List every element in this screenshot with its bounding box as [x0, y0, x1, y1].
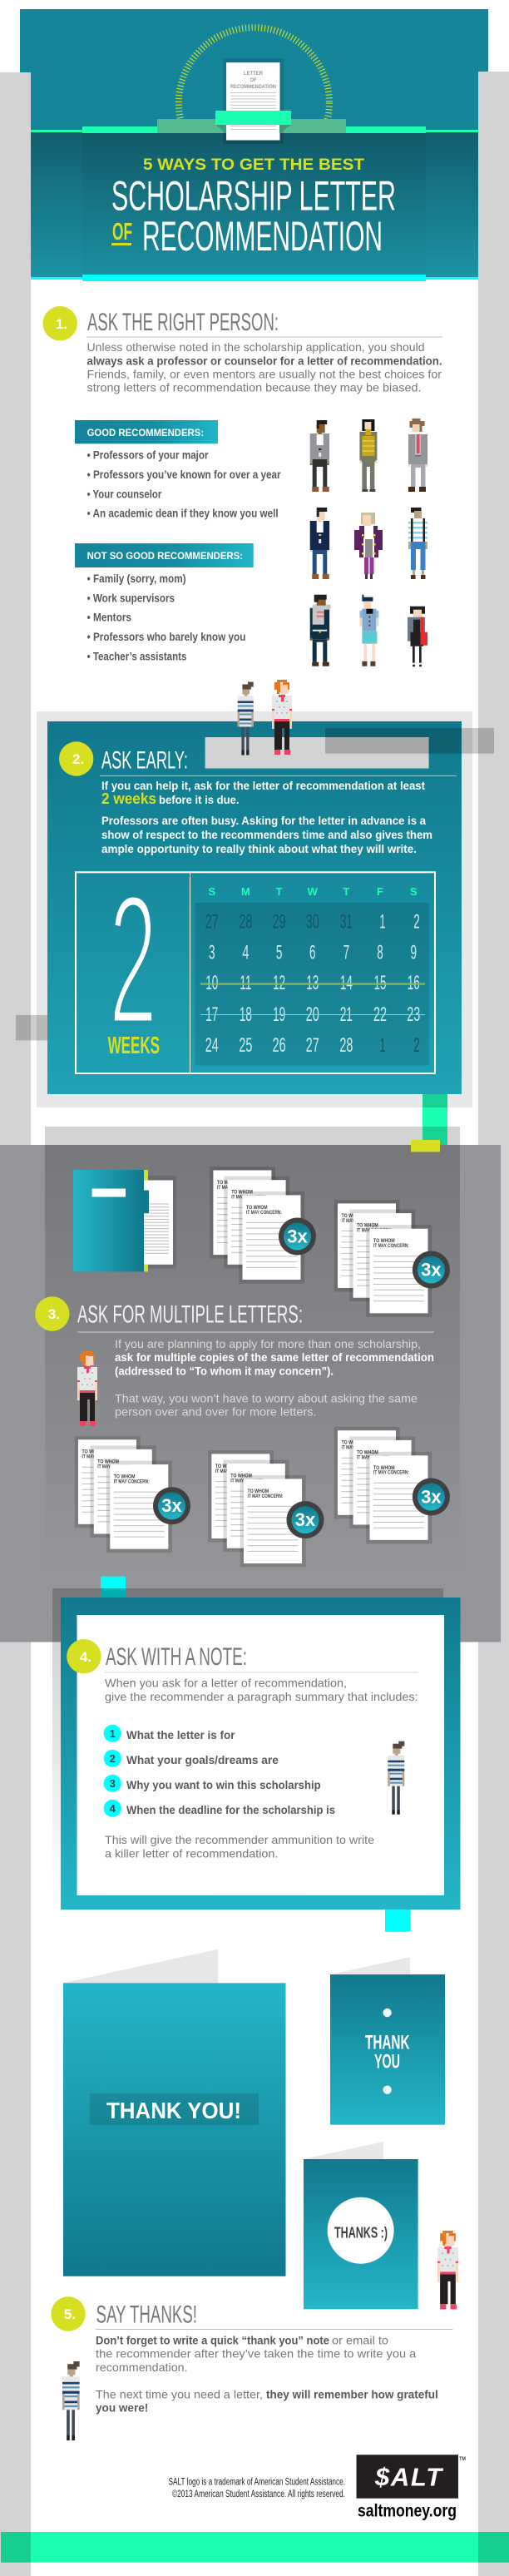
letter stack E: TO WHOM: [357, 1449, 378, 1455]
icon: assistant with red bag: [408, 607, 427, 666]
good recommenders label: [75, 420, 218, 443]
paragraph: thank you note: the recommender after they’ve taken the time to write you a: [96, 2347, 417, 2361]
date grid: 5: [276, 941, 282, 964]
badge 3x: 3x: [161, 1495, 182, 1516]
closing paragraph: This will give the recommender ammunition to write: [105, 1833, 374, 1846]
letter stack A: TO WHOM: [231, 1190, 253, 1196]
title: [111, 156, 396, 260]
paragraph: multiple copies: That way, you won’t have to worry about asking the same: [115, 1391, 418, 1404]
icon: letter of recommendation: [223, 58, 284, 144]
connector: green block: [423, 1094, 447, 1127]
date grid: 31: [340, 910, 353, 933]
step 5: thank you cards: [51, 1949, 458, 2440]
not so good recommenders label: NOT SO GOOD RECOMMENDERS:: [87, 550, 243, 562]
date grid: 2: [413, 910, 420, 933]
number badge 1: 1.: [56, 316, 67, 332]
good recommenders list: • Your counselor: [87, 488, 162, 500]
letter stack D: IT MAY CONCERN:: [215, 1469, 251, 1474]
intro paragraph: Unless otherwise noted in the scholarship application, you should: [86, 340, 424, 354]
card: thanks smiley: [304, 2142, 418, 2309]
weekday headings: T: [343, 885, 349, 898]
letter stack D: [208, 1450, 324, 1568]
not so good recommenders list: • Mentors: [87, 612, 131, 624]
letter stack D: IT MAY CONCERN:: [248, 1494, 283, 1499]
legal text: SALT logo is a trademark of American Student Assistance.: [168, 2478, 345, 2488]
numbered list: What the letter is for: [126, 1729, 235, 1741]
badge 3x: 3x: [421, 1486, 442, 1508]
badge 3x: [153, 1487, 190, 1524]
icon: woman purple coat: [354, 513, 383, 579]
letter stack B: [334, 1200, 450, 1317]
paragraph: multiple copies: ask for multiple copies of the same letter of recommendation: [115, 1350, 434, 1364]
step 3: ask for multiple letters: [0, 1127, 501, 1642]
letter stack C: [75, 1436, 190, 1553]
weekday headings: [208, 885, 418, 898]
letter stack E: [334, 1427, 450, 1543]
icon: letter of recommendation: OF: [250, 77, 257, 83]
numbered list: When the deadline for the scholarship is: [126, 1804, 335, 1816]
letter stack D: TO WHOM: [248, 1489, 269, 1494]
icon: radiating arc: [179, 27, 329, 178]
not so good recommenders list: • Work supervisors: [87, 592, 175, 604]
badge 3x: 3x: [421, 1260, 442, 1280]
date grid: 9: [410, 941, 417, 964]
letter stack A: TO WHOM: [246, 1205, 268, 1211]
paragraph: thank you note: Don’t forget to write a quick “thank you” note: [96, 2333, 329, 2346]
title: 5 WAYS TO GET THE BEST: [143, 156, 364, 174]
header banner: [0, 9, 509, 281]
number badge 3: 3.: [48, 1306, 60, 1322]
letter stack C: IT MAY CONCERN:: [114, 1479, 150, 1484]
date grid: 10: [205, 972, 218, 994]
date grid: 11: [240, 972, 251, 994]
heading 2: ASK EARLY:: [101, 746, 188, 774]
letter stack A: IT MAY CONCERN:: [217, 1185, 253, 1191]
date grid: 24: [205, 1034, 219, 1057]
icon: letter of recommendation: LETTER: [244, 71, 263, 77]
number badge 2: 2.: [72, 751, 84, 767]
paragraph: two weeks: before it is due.: [159, 793, 240, 806]
letter stack E: IT MAY CONCERN:: [341, 1445, 378, 1451]
letter stack B: IT MAY CONCERN:: [373, 1243, 409, 1249]
numbered list: 2: [110, 1752, 116, 1765]
weekday headings: S: [410, 885, 418, 898]
letter stack B: TO WHOM: [373, 1238, 395, 1244]
letter stack C: IT MAY CONCERN:: [82, 1454, 118, 1460]
badge 3x: 3x: [287, 1226, 308, 1246]
paragraph: thank you note: The next time you need a letter,: [96, 2387, 263, 2400]
numbered list: [104, 1725, 335, 1817]
date grid: 21: [340, 1003, 353, 1026]
paragraph: thank you note: or email to: [332, 2333, 388, 2346]
heading 5: SAY THANKS!: [96, 2301, 197, 2329]
number badge 3: [35, 1296, 70, 1331]
weeks label: WEEKS: [108, 1033, 160, 1059]
date grid: 7: [343, 941, 349, 964]
paragraph: two weeks: Professors are often busy. Asking for the letter in advance is a: [101, 814, 426, 827]
good recommenders list: • Professors of your major: [87, 449, 209, 462]
paragraph: two weeks: ample opportunity to really think about what they will write.: [101, 842, 417, 855]
badge 3x: [279, 1218, 316, 1255]
card: thanks smiley: THANKS :): [334, 2223, 388, 2241]
intro paragraph: When you ask for a letter of recommendation,: [105, 1677, 347, 1690]
legal text: [168, 2478, 345, 2499]
date grid: [205, 910, 420, 1057]
icon: teacher navy with scarf: [310, 595, 331, 666]
date grid: 6: [309, 941, 316, 964]
icon: redhead student: [77, 1351, 97, 1426]
letter stack A: IT MAY CONCERN:: [246, 1210, 282, 1216]
letter stack D: TO WHOM: [215, 1464, 236, 1469]
legal text: ©2013 American Student Assistance. All rights reserved.: [172, 2489, 345, 2499]
icon: mentor striped shirt: [408, 508, 427, 579]
paragraph: thank you note: you were!: [96, 2400, 148, 2414]
date grid: 1: [379, 1034, 386, 1057]
date grid: 28: [339, 1034, 353, 1057]
SALT logo: $ALT: [374, 2463, 444, 2492]
numbered list: Why you want to win this scholarship: [126, 1779, 321, 1791]
step 2: ask early panel: [16, 680, 494, 1107]
intro paragraph: Friends, family, or even mentors are usually not the best choices for: [86, 367, 442, 380]
letter stack E: TO WHOM: [341, 1440, 363, 1446]
paragraph: multiple copies: If you are planning to apply for more than one scholarship,: [115, 1337, 421, 1350]
header panel: [82, 133, 426, 275]
date grid: 22: [373, 1003, 387, 1026]
letter stack E: IT MAY CONCERN:: [373, 1470, 409, 1476]
numbered list: 3: [110, 1777, 116, 1790]
date grid: 2: [413, 1034, 420, 1057]
card: thank you large: [63, 1949, 286, 2276]
paragraph: thank you note: [96, 2333, 438, 2414]
letter stack C: TO WHOM: [97, 1459, 119, 1464]
good recommenders list: • An academic dean if they know you well: [87, 508, 279, 520]
weekday headings: M: [241, 885, 250, 898]
icon: folder with paper: [73, 1170, 176, 1271]
icon: redhead student: [437, 2231, 458, 2310]
date grid: 18: [240, 1003, 252, 1026]
not so good recommenders list: • Family (sorry, mom): [87, 572, 186, 585]
number badge 1: [42, 306, 77, 340]
date grid: 23: [407, 1003, 420, 1026]
weekday headings: W: [308, 885, 319, 898]
card: thank you with dots: THANK: [365, 2032, 410, 2054]
weekday headings: F: [377, 885, 383, 898]
icon: student with bun: [388, 1741, 404, 1815]
heading 4: ASK WITH A NOTE:: [106, 1643, 247, 1671]
closing paragraph: [105, 1833, 374, 1860]
number badge 2: [59, 741, 93, 776]
date grid: 3: [209, 941, 215, 964]
icon: redhead student on ledge: [272, 680, 292, 755]
calendar: [76, 857, 435, 1073]
intro paragraph: [86, 340, 442, 394]
date grid: 17: [205, 1003, 218, 1026]
step 1: ask the right person: [42, 306, 442, 666]
icon: professor grey suit: [408, 419, 427, 492]
date grid: 27: [205, 910, 219, 933]
not so good recommenders list: [87, 572, 245, 662]
not so good recommenders list: • Teacher’s assistants: [87, 650, 186, 662]
date grid: 8: [377, 941, 383, 964]
not so good recommenders list: • Professors who barely know you: [87, 631, 245, 643]
intro paragraph: strong letters of recommendation because they may be biased.: [86, 381, 421, 394]
date grid: 4: [242, 941, 249, 964]
date grid: 29: [273, 910, 286, 933]
icon: student with bun on ledge: [238, 682, 254, 755]
not so good recommenders label: [75, 543, 254, 567]
date grid: 1: [379, 910, 386, 933]
date grid: 19: [273, 1003, 285, 1026]
paragraph: thank you note: recommendation.: [96, 2361, 188, 2374]
letter stack B: TO WHOM: [357, 1223, 378, 1229]
paragraph: multiple copies: person over and over for more letters.: [115, 1405, 316, 1419]
title: OF: [112, 219, 132, 245]
SALT logo: TM: [459, 2456, 466, 2462]
footer: [1, 2455, 509, 2563]
SALT logo: [356, 2455, 466, 2520]
icon: dean navy blazer: [310, 508, 329, 579]
weekday headings: T: [276, 885, 283, 898]
intro paragraph: give the recommender a paragraph summary that includes:: [105, 1690, 418, 1703]
icon: letter of recommendation: RECOMMENDATION: [230, 84, 276, 90]
numbered list: 4: [110, 1802, 116, 1815]
icon: student with bun: [62, 2361, 80, 2440]
closing paragraph: a killer letter of recommendation.: [105, 1846, 278, 1860]
date grid: 30: [306, 910, 319, 933]
paragraph: two weeks: show of respect to the recommenders time and also gives them: [101, 828, 432, 841]
SALT logo: saltmoney.org: [358, 2501, 457, 2520]
letter stack A: [210, 1167, 316, 1283]
letter stack B: TO WHOM: [341, 1213, 363, 1219]
badge 3x: [286, 1501, 324, 1538]
card: thank you with dots: [330, 1957, 445, 2125]
number badge 5: [51, 2296, 86, 2331]
step 4: ask with a note: [52, 1577, 461, 1932]
number badge 5: 5.: [64, 2306, 76, 2322]
letter stack C: IT MAY CONCERN:: [97, 1464, 133, 1469]
number badge 4: 4.: [80, 1649, 91, 1665]
intro paragraph: [105, 1677, 418, 1703]
paragraph: multiple copies: (addressed to “To whom it may concern”).: [115, 1364, 334, 1377]
date grid: 12: [273, 972, 285, 994]
date grid: 20: [306, 1003, 319, 1026]
calendar: 2: [109, 857, 157, 1063]
badge 3x: [413, 1251, 450, 1288]
icon: assistant blue shirt shorts: [359, 595, 378, 666]
date grid: 28: [239, 910, 252, 933]
paragraph: thank you note: they will remember how grateful: [266, 2387, 438, 2400]
letter stack A: IT MAY CONCERN:: [231, 1195, 267, 1201]
paragraph: two weeks: [101, 779, 432, 855]
numbered list: 1: [110, 1727, 116, 1740]
card: thank you with dots: YOU: [374, 2050, 400, 2073]
letter stack E: IT MAY CONCERN:: [357, 1454, 393, 1460]
good recommenders label: GOOD RECOMMENDERS:: [87, 427, 204, 438]
date grid: 15: [374, 972, 386, 994]
icon: professor yellow sweater: [359, 419, 377, 492]
letter stack B: IT MAY CONCERN:: [341, 1218, 378, 1224]
date grid: 27: [306, 1034, 319, 1057]
badge 3x: [413, 1478, 450, 1516]
intro paragraph: always ask a professor or counselor for a letter of recommendation.: [86, 354, 442, 367]
date grid: 13: [306, 972, 319, 994]
paragraph: two weeks: If you can help it, ask for the letter of recommendation at least: [101, 779, 425, 792]
good recommenders list: • Professors you’ve known for over a year: [87, 468, 281, 481]
heading 3: ASK FOR MULTIPLE LETTERS:: [77, 1301, 303, 1329]
letter stack D: IT MAY CONCERN:: [230, 1478, 266, 1484]
numbered list: What your goals/dreams are: [126, 1754, 279, 1766]
letter stack B: IT MAY CONCERN:: [357, 1228, 393, 1233]
weekday headings: S: [208, 885, 215, 898]
bottom band: [1, 2532, 509, 2563]
letter stack C: TO WHOM: [82, 1449, 103, 1455]
letter stack A: TO WHOM: [217, 1180, 239, 1186]
letter stack E: TO WHOM: [373, 1465, 395, 1471]
card: thank you large: THANK YOU!: [106, 2098, 241, 2123]
date grid: 25: [239, 1034, 252, 1057]
date grid: 14: [340, 972, 353, 994]
badge 3x: 3x: [295, 1509, 316, 1530]
paragraph: two weeks: 2 weeks: [101, 790, 156, 807]
icon: professor grey blazer: [310, 420, 329, 492]
good recommenders list: [87, 449, 281, 520]
date grid: 26: [273, 1034, 286, 1057]
heading 1: ASK THE RIGHT PERSON:: [87, 309, 279, 336]
letter stack D: TO WHOM: [230, 1474, 252, 1479]
number badge 4: [67, 1639, 101, 1673]
date grid: 16: [408, 972, 420, 994]
letter stack C: TO WHOM: [114, 1474, 135, 1480]
paragraph: multiple copies: [115, 1337, 434, 1419]
